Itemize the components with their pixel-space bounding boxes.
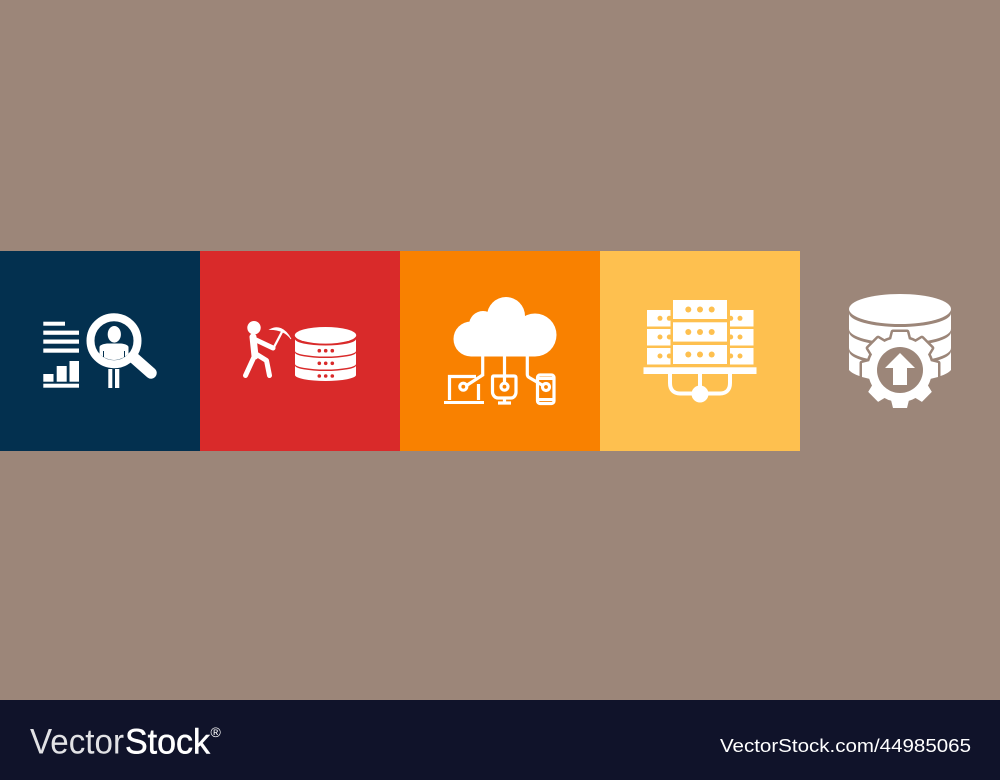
cloud <box>454 297 556 356</box>
connectors and devices <box>444 356 554 404</box>
footer bar <box>0 700 1000 780</box>
icon: miner with pickaxe and database <box>246 321 356 381</box>
logo wordmark: Stock <box>125 722 210 762</box>
panel: navy tile <box>0 251 200 451</box>
logo wordmark <box>30 722 222 762</box>
image id: VectorStock.com/44985065 <box>720 736 971 756</box>
database stack <box>295 327 356 381</box>
panel: red tile <box>200 251 400 451</box>
icon: database with upload gear <box>849 294 951 408</box>
logo wordmark: ® <box>210 724 222 740</box>
icon: cloud connected to devices <box>444 297 556 404</box>
panel: orange tile <box>400 251 600 451</box>
logo wordmark: Vector <box>30 722 124 762</box>
icon: server racks with network node <box>644 300 756 402</box>
panel: yellow tile <box>600 251 800 451</box>
miner figure <box>246 321 291 376</box>
icon: user analysis magnifier with report <box>43 317 151 388</box>
